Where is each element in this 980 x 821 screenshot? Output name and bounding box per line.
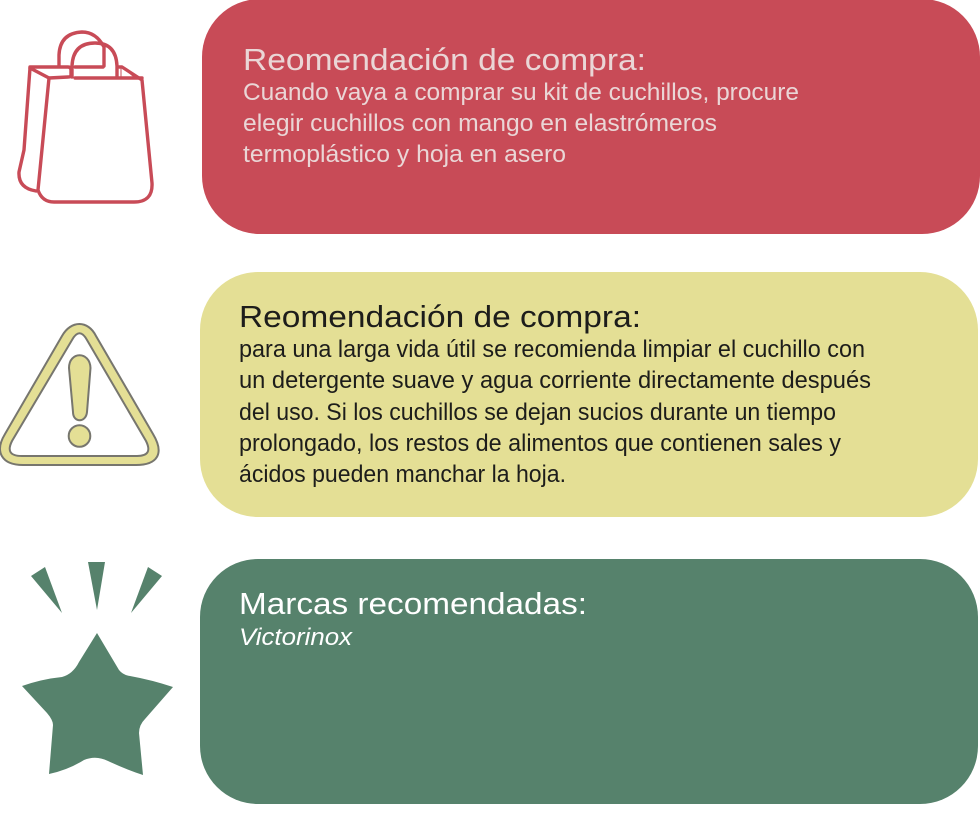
text block: care advice: para una larga vida útil se recomienda limpiar el cuchillo con xyxy=(239,336,865,363)
panel: recommended brands xyxy=(200,559,978,804)
heading: recommended brands: Marcas recomendadas: xyxy=(239,586,587,621)
text block: brand name: Victorinox xyxy=(239,624,353,651)
icon: shopping bag xyxy=(19,32,152,202)
text block: care advice: del uso. Si los cuchillos se dejan sucios durante un tiempo xyxy=(239,399,836,426)
text block: purchase advice: termoplástico y hoja en asero xyxy=(243,141,566,168)
text block: purchase advice xyxy=(243,79,799,168)
text block: care advice: ácidos pueden manchar la hoja. xyxy=(239,461,566,488)
heading: purchase recommendation: Reomendación de compra: xyxy=(243,42,646,77)
panel: purchase recommendation xyxy=(202,0,980,234)
text block: care advice: un detergente suave y agua corriente directamente después xyxy=(239,367,871,394)
text block: care advice xyxy=(239,336,871,488)
text block: purchase advice: elegir cuchillos con mango en elastrómeros xyxy=(243,110,717,137)
heading: care recommendation: Reomendación de compra: xyxy=(239,299,641,334)
text block: purchase advice: Cuando vaya a comprar su kit de cuchillos, procure xyxy=(243,79,799,106)
text block: care advice: prolongado, los restos de alimentos que contienen sales y xyxy=(239,430,841,457)
panel: care recommendation xyxy=(200,272,978,517)
icon: star with rays xyxy=(22,562,173,775)
icon: warning triangle xyxy=(0,324,159,465)
